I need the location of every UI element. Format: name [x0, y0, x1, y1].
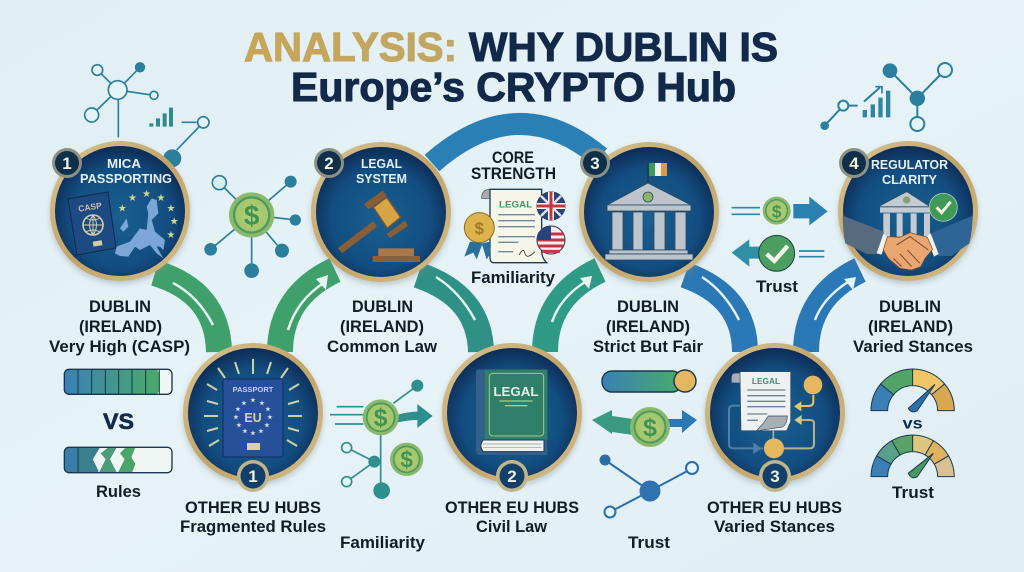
icon: EU passport: ★ [235, 406, 241, 413]
icon: double arrow with coin [592, 407, 697, 447]
text: core strength: STRENGTH [471, 164, 556, 183]
icon: money flow arrows with network: $ [374, 405, 388, 432]
badge 1 [237, 460, 269, 492]
icon: EU map with stars: ★ [118, 203, 127, 213]
text: regulator clarity heading: CLARITY [882, 172, 937, 187]
title [244, 24, 778, 110]
text: core strength: CORE [492, 148, 534, 167]
text: familiarity bottom: Familiarity [340, 533, 426, 552]
text: familiarity: Familiarity [471, 268, 556, 287]
icon: network top left [85, 63, 209, 167]
text: rules: Rules [96, 482, 141, 501]
text: regulator clarity heading: REGULATOR [871, 157, 949, 172]
icon: legal book [476, 369, 547, 455]
icon: EU map with stars: ★ [167, 203, 176, 213]
icon: EU passport: ★ [236, 422, 242, 429]
icon: dollar network left [204, 176, 301, 278]
icon: EU passport: ★ [267, 414, 273, 421]
icon: bank building [605, 183, 693, 260]
text: legal system heading: SYSTEM [356, 171, 407, 186]
icon: EU passport: EU [244, 411, 262, 425]
text: Dublin label 2: Common Law [327, 337, 438, 356]
icon: EU passport: ★ [258, 428, 264, 435]
text: other EU hubs label 2: OTHER EU HUBS [445, 498, 579, 517]
text: vs: vs [903, 415, 923, 432]
icon: legal scroll with flags: LEGAL [499, 199, 533, 209]
icon: dollar network left: $ [244, 200, 260, 231]
icon: EU map with stars: ★ [167, 229, 176, 239]
arc: top blue connector [432, 124, 600, 163]
text: regulator clarity heading [871, 157, 949, 187]
icon: flag [648, 163, 667, 184]
icon: CASP passport: CASP [78, 200, 103, 214]
badge 2 [496, 460, 528, 492]
icon: EU map with stars: ★ [170, 216, 179, 226]
badge 3: 3 [770, 467, 780, 486]
bar: Dublin very high [64, 369, 172, 394]
text: legal system heading [356, 156, 407, 186]
arc: blue connector 5 [685, 275, 745, 352]
icon: top right network [820, 63, 952, 131]
icon: money flow arrows with network [330, 380, 433, 499]
text: Dublin label 2: (IRELAND) [340, 317, 424, 336]
arc: green connector 1 [155, 273, 219, 352]
text: MiCA heading: PASSPORTING [80, 171, 172, 186]
text: MiCA heading: MICA [107, 156, 142, 171]
icon: network bottom centre [600, 454, 698, 518]
arc: teal connector 3 [418, 275, 481, 352]
text: other EU hubs label 2: Civil Law [476, 517, 548, 536]
text: MiCA heading [80, 156, 172, 186]
icon: EU map with stars: ★ [157, 193, 166, 203]
text: Dublin label 1: DUBLIN [89, 297, 151, 316]
icon: double arrow with coin: $ [643, 414, 657, 442]
gauge: Dublin [871, 369, 954, 412]
text: Dublin label 4: Varied Stances [853, 337, 973, 356]
panel: core strength [464, 148, 565, 287]
icon: gavel [340, 191, 420, 262]
text: legal system heading: LEGAL [361, 156, 402, 171]
icon: EU passport: ★ [250, 397, 256, 404]
bar: other hubs fragmented [64, 447, 172, 473]
icon: EU passport: PASSPORT [233, 385, 274, 394]
text: other EU hubs label 1: Fragmented Rules [180, 517, 326, 536]
text: other EU hubs label 3: Varied Stances [714, 517, 835, 536]
text: Dublin label 1 [49, 297, 190, 356]
text: core strength [471, 148, 556, 183]
chart: gauges [871, 369, 954, 478]
badge 4: 4 [849, 154, 859, 173]
icon: radiating lines [204, 359, 302, 446]
title: ANALYSIS: [244, 24, 457, 70]
arc: blue connector 6 [806, 270, 860, 352]
badge 2 [314, 148, 344, 178]
icon: building and handshake [843, 192, 973, 270]
icon: legal book: LEGAL [493, 384, 539, 399]
title: Europe’s CRYPTO Hub [291, 64, 736, 110]
text: Dublin label 3: DUBLIN [617, 297, 679, 316]
icon: EU passport: ★ [259, 400, 265, 407]
text: Dublin label 1: Very High (CASP) [49, 337, 190, 356]
panel: civil law book [442, 343, 582, 492]
badge 2: 2 [507, 467, 517, 486]
text: other EU hubs label 3: OTHER EU HUBS [707, 498, 842, 517]
arc: teal connector 4 [545, 270, 600, 352]
icon: legal scroll with flags: $ [475, 219, 485, 238]
icon: EU passport: ★ [241, 400, 247, 407]
text: Dublin label 4 [853, 297, 973, 356]
panel: MiCA passporting [50, 141, 190, 284]
icon: EU map with stars: ★ [143, 189, 152, 199]
badge 1: 1 [62, 154, 72, 173]
icon: flow document: LEGAL [752, 376, 780, 386]
gauge: other hubs [871, 435, 954, 478]
text: Dublin label 3: Strict But Fair [593, 337, 703, 356]
icon: CASP passport [68, 192, 116, 255]
icon: money flow arrows with network: $ [400, 446, 413, 472]
panel: Irish institution [579, 142, 719, 285]
panel: varied stances document [705, 343, 845, 492]
icon: EU passport: ★ [265, 406, 271, 413]
text: trust gauges: Trust [892, 483, 934, 502]
panel: legal system [311, 142, 451, 285]
text: trust top: Trust [756, 277, 798, 296]
text: Dublin label 4: DUBLIN [879, 297, 941, 316]
text: Dublin label 2 [327, 297, 438, 356]
badge 1: 1 [248, 467, 258, 486]
badge 1 [52, 148, 82, 178]
icon: flow document [729, 372, 822, 458]
text: Dublin label 2: DUBLIN [352, 297, 413, 316]
arc: green connector 2 [280, 270, 335, 352]
icon: trust exchange arrows [732, 197, 828, 271]
icon: trust exchange arrows: $ [772, 201, 782, 221]
text: other EU hubs label 1 [180, 498, 326, 536]
icon: EU passport [223, 379, 283, 457]
text: trust bottom: Trust [628, 533, 670, 552]
panel: EU passport [183, 343, 323, 492]
text: Dublin label 1: (IRELAND) [79, 317, 162, 336]
badge 3: 3 [590, 154, 600, 173]
text: other EU hubs label 3 [707, 498, 842, 536]
badge 3 [759, 460, 791, 492]
badge 3 [580, 148, 610, 178]
icon: EU map with stars: ★ [129, 193, 138, 203]
text: other EU hubs label 2 [445, 498, 579, 536]
badge 2: 2 [324, 154, 334, 173]
icon: EU map with stars [115, 189, 179, 258]
text: Dublin label 3: (IRELAND) [606, 317, 690, 336]
text: other EU hubs label 1: OTHER EU HUBS [185, 498, 321, 517]
text: Dublin label 4: (IRELAND) [868, 317, 953, 336]
badge 4 [839, 148, 869, 178]
icon: EU passport: ★ [233, 414, 239, 421]
icon: EU passport: ★ [250, 430, 256, 437]
icon: slider bar [602, 370, 696, 392]
text: Dublin label 3 [593, 297, 703, 356]
icon: EU passport: ★ [242, 428, 248, 435]
icon: EU passport: ★ [264, 422, 270, 429]
title: WHY DUBLIN IS [469, 24, 778, 70]
chart: comparison progress bars [64, 369, 172, 501]
panel: regulator clarity [838, 141, 978, 284]
text: VS: VS [103, 409, 134, 434]
icon: legal scroll with flags [464, 189, 565, 263]
